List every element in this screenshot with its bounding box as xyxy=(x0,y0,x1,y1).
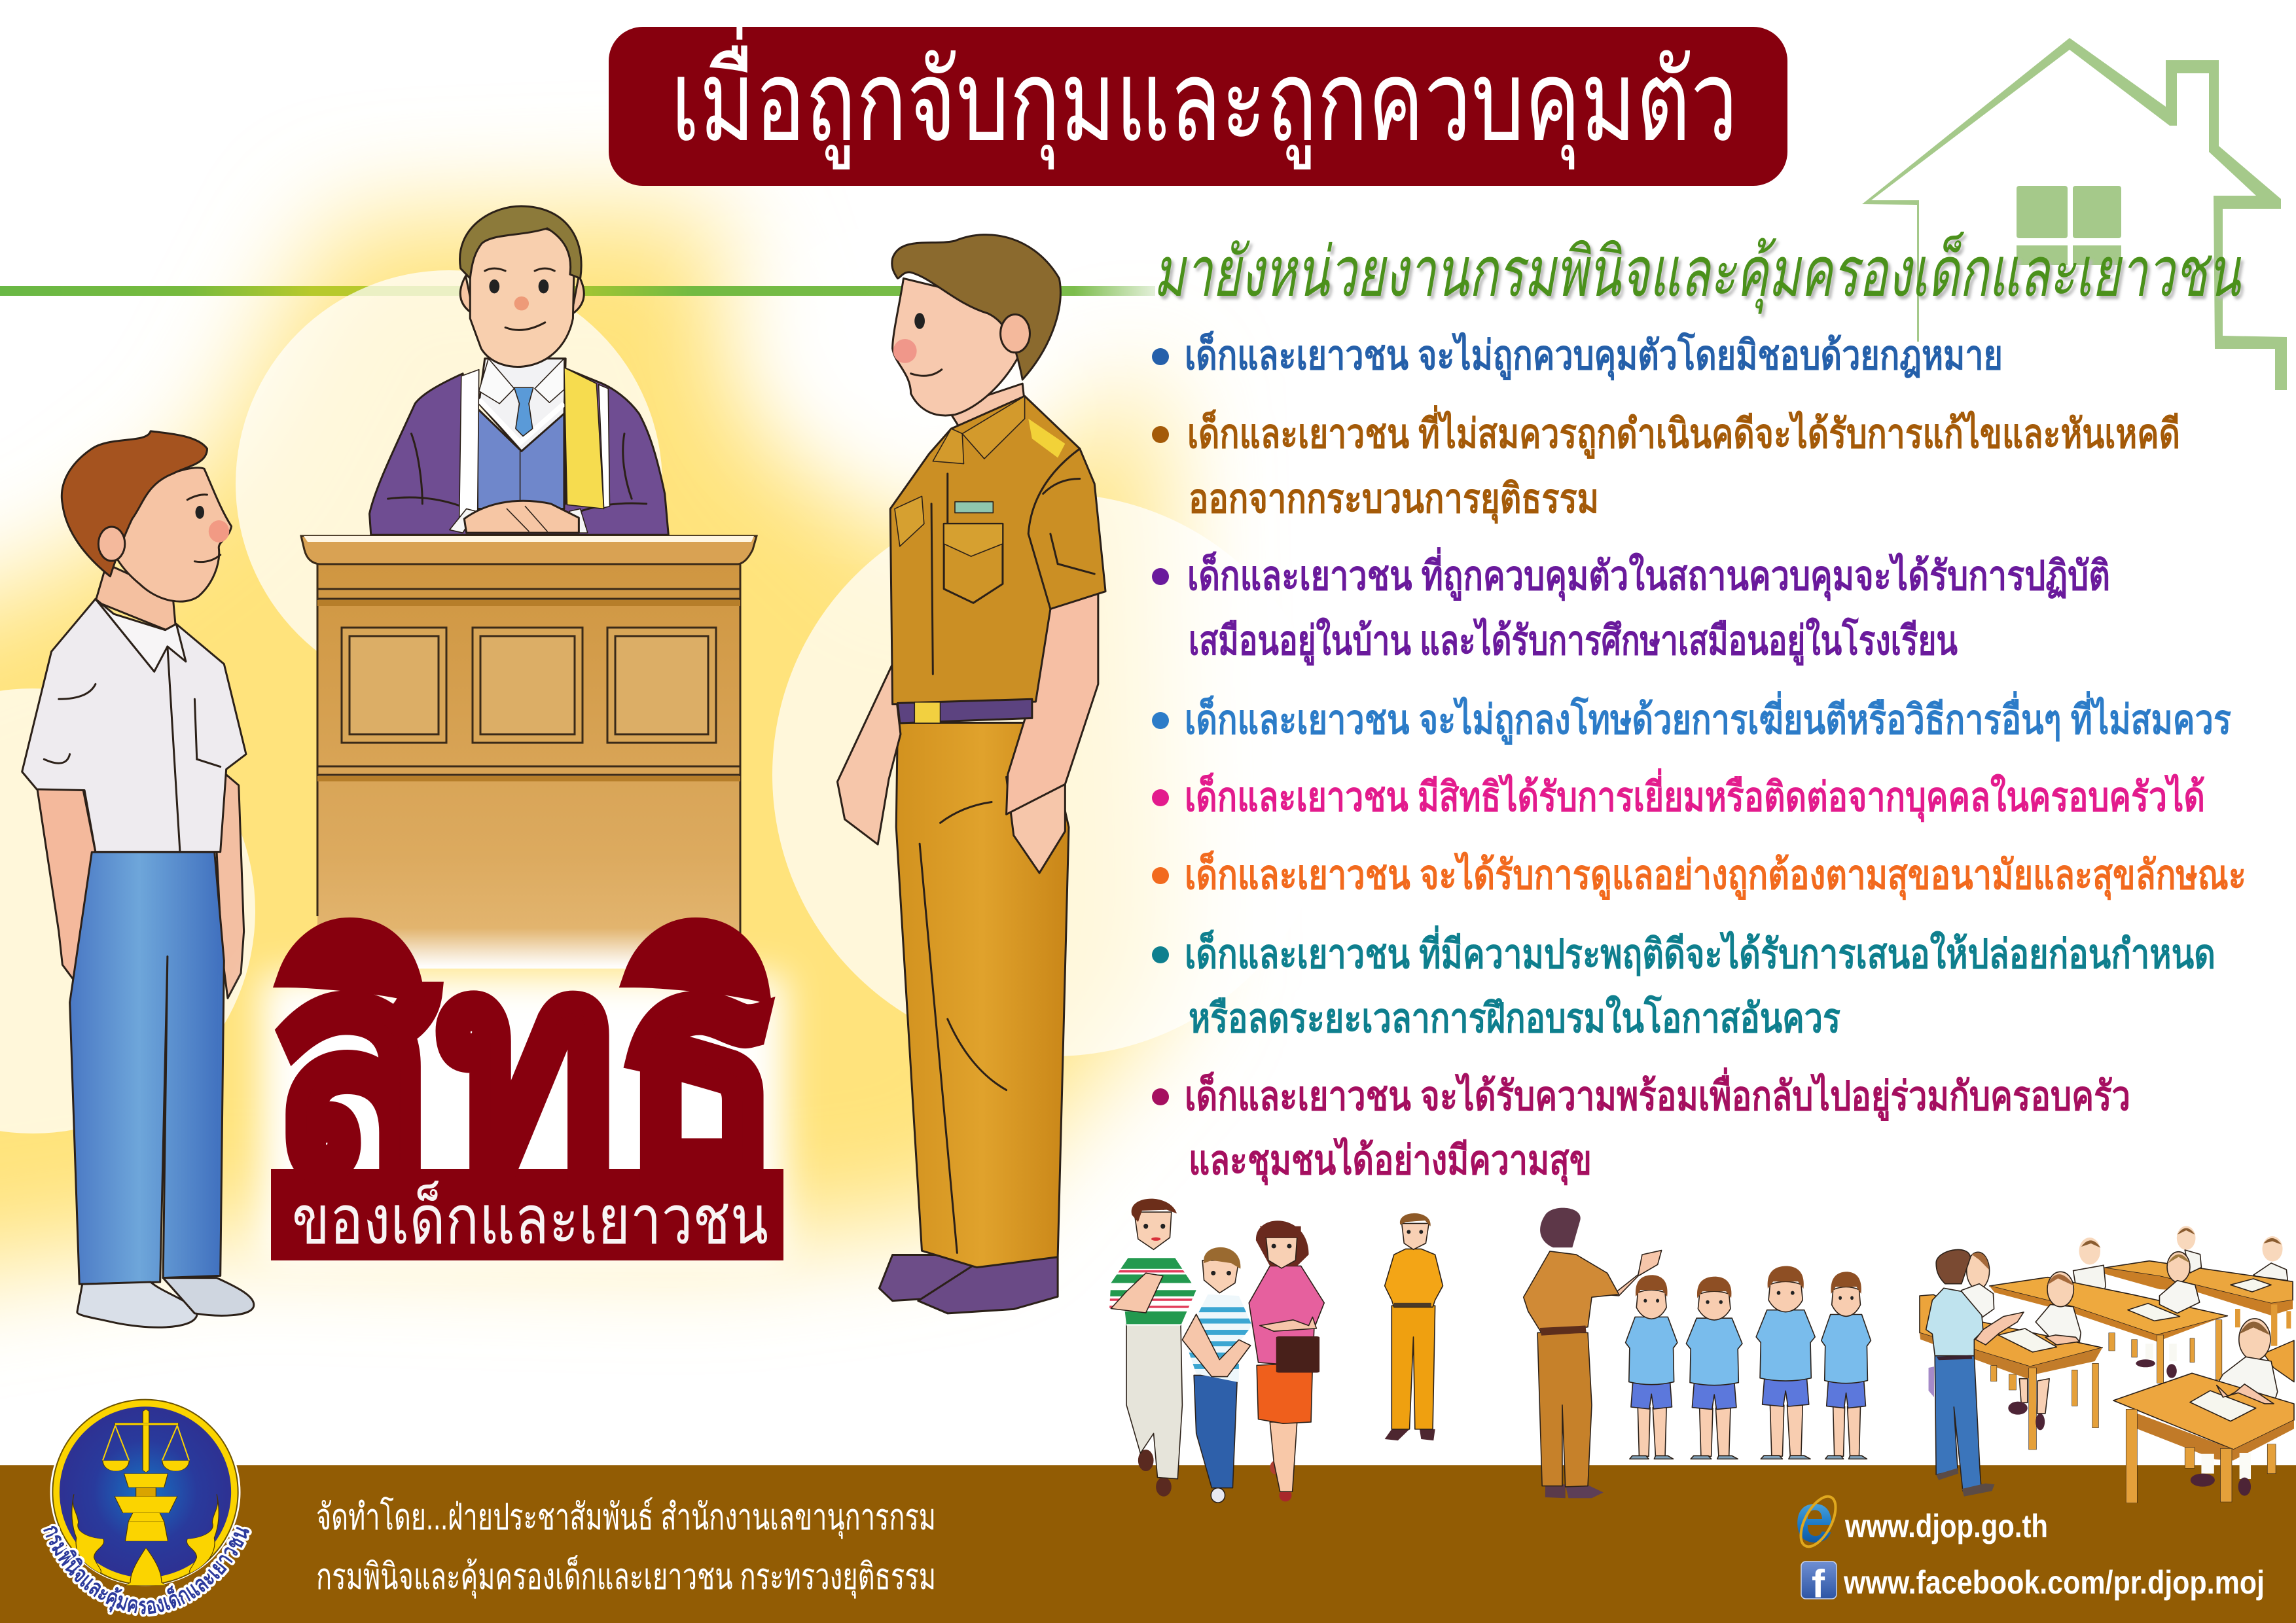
icon: house outline xyxy=(1862,38,2287,390)
figure: desk xyxy=(301,536,757,969)
item 2 xyxy=(1152,405,2180,524)
rights block white halo xyxy=(262,975,785,1263)
green rule xyxy=(0,286,1155,296)
footer credits: จัดทำโดย...ฝ่ายประชาสัมพันธ์ สำนักงานเลขานุการกรม xyxy=(316,1496,936,1539)
website url: www.djop.go.th xyxy=(1844,1508,2048,1544)
item 3: เด็กและเยาวชน ที่ถูกควบคุมตัวในสถานควบคุมจะได้รับการปฏิบัติ xyxy=(1187,547,2110,601)
footer band xyxy=(0,1465,2296,1623)
heading: rights: สิทธิ xyxy=(271,898,783,1236)
heading: of children and youth: ของเด็กและเยาวชน xyxy=(292,1180,768,1258)
item 7 xyxy=(1152,925,2215,1041)
middle student xyxy=(2159,1252,2200,1313)
footer credits xyxy=(316,1496,936,1599)
background: pale circles xyxy=(0,270,1335,1133)
emblem ribbon text: กรมพินิจและคุ้มครองเด็กและเยาวชน xyxy=(41,1524,252,1616)
figure: judge xyxy=(370,206,668,535)
item 1: เด็กและเยาวชน จะไม่ถูกควบคุมตัวโดยมิชอบด้วยกฎหมาย xyxy=(1185,330,2003,380)
icon: facebook: f xyxy=(1812,1562,1825,1606)
rights list xyxy=(1152,330,2246,1185)
standing teacher xyxy=(1926,1249,2024,1497)
item 8 xyxy=(1152,1067,2130,1185)
figures: classroom xyxy=(1920,1226,2294,1503)
front-right student xyxy=(2217,1319,2278,1404)
icon: facebook xyxy=(1801,1561,1837,1606)
figure: uniformed officer xyxy=(837,235,1105,1313)
figures: four boys xyxy=(1626,1266,1871,1459)
emblem: department logo xyxy=(41,1399,252,1616)
item 3 xyxy=(1152,547,2110,666)
item 8: และชุมชนได้อย่างมีความสุข xyxy=(1189,1137,1592,1185)
front-left student xyxy=(1962,1252,2081,1345)
item 3: เสมือนอยู่ในบ้าน และได้รับการศึกษาเสมือนอยู่ในโรงเรียน xyxy=(1189,616,1958,666)
icon: browser: e xyxy=(1795,1478,1834,1557)
figures: family xyxy=(1103,1199,1324,1503)
item 7: หรือลดระยะเวลาการฝึกอบรมในโอกาสอันควร xyxy=(1189,994,1840,1041)
rights heading block xyxy=(271,898,783,1260)
item 2: ออกจากกระบวนการยุติธรรม xyxy=(1189,476,1599,524)
figure: small officer xyxy=(1385,1213,1443,1440)
back students xyxy=(2073,1226,2287,1293)
footer credits: กรมพินิจและคุ้มครองเด็กและเยาวชน กระทรวงยุติธรรม xyxy=(316,1554,936,1599)
title text: เมื่อถูกจับกุมและถูกควบคุมตัว xyxy=(671,24,1738,169)
title banner xyxy=(609,24,1787,186)
figure: teacher from behind xyxy=(1524,1208,1662,1498)
figure: boy in white shirt xyxy=(22,431,254,1327)
